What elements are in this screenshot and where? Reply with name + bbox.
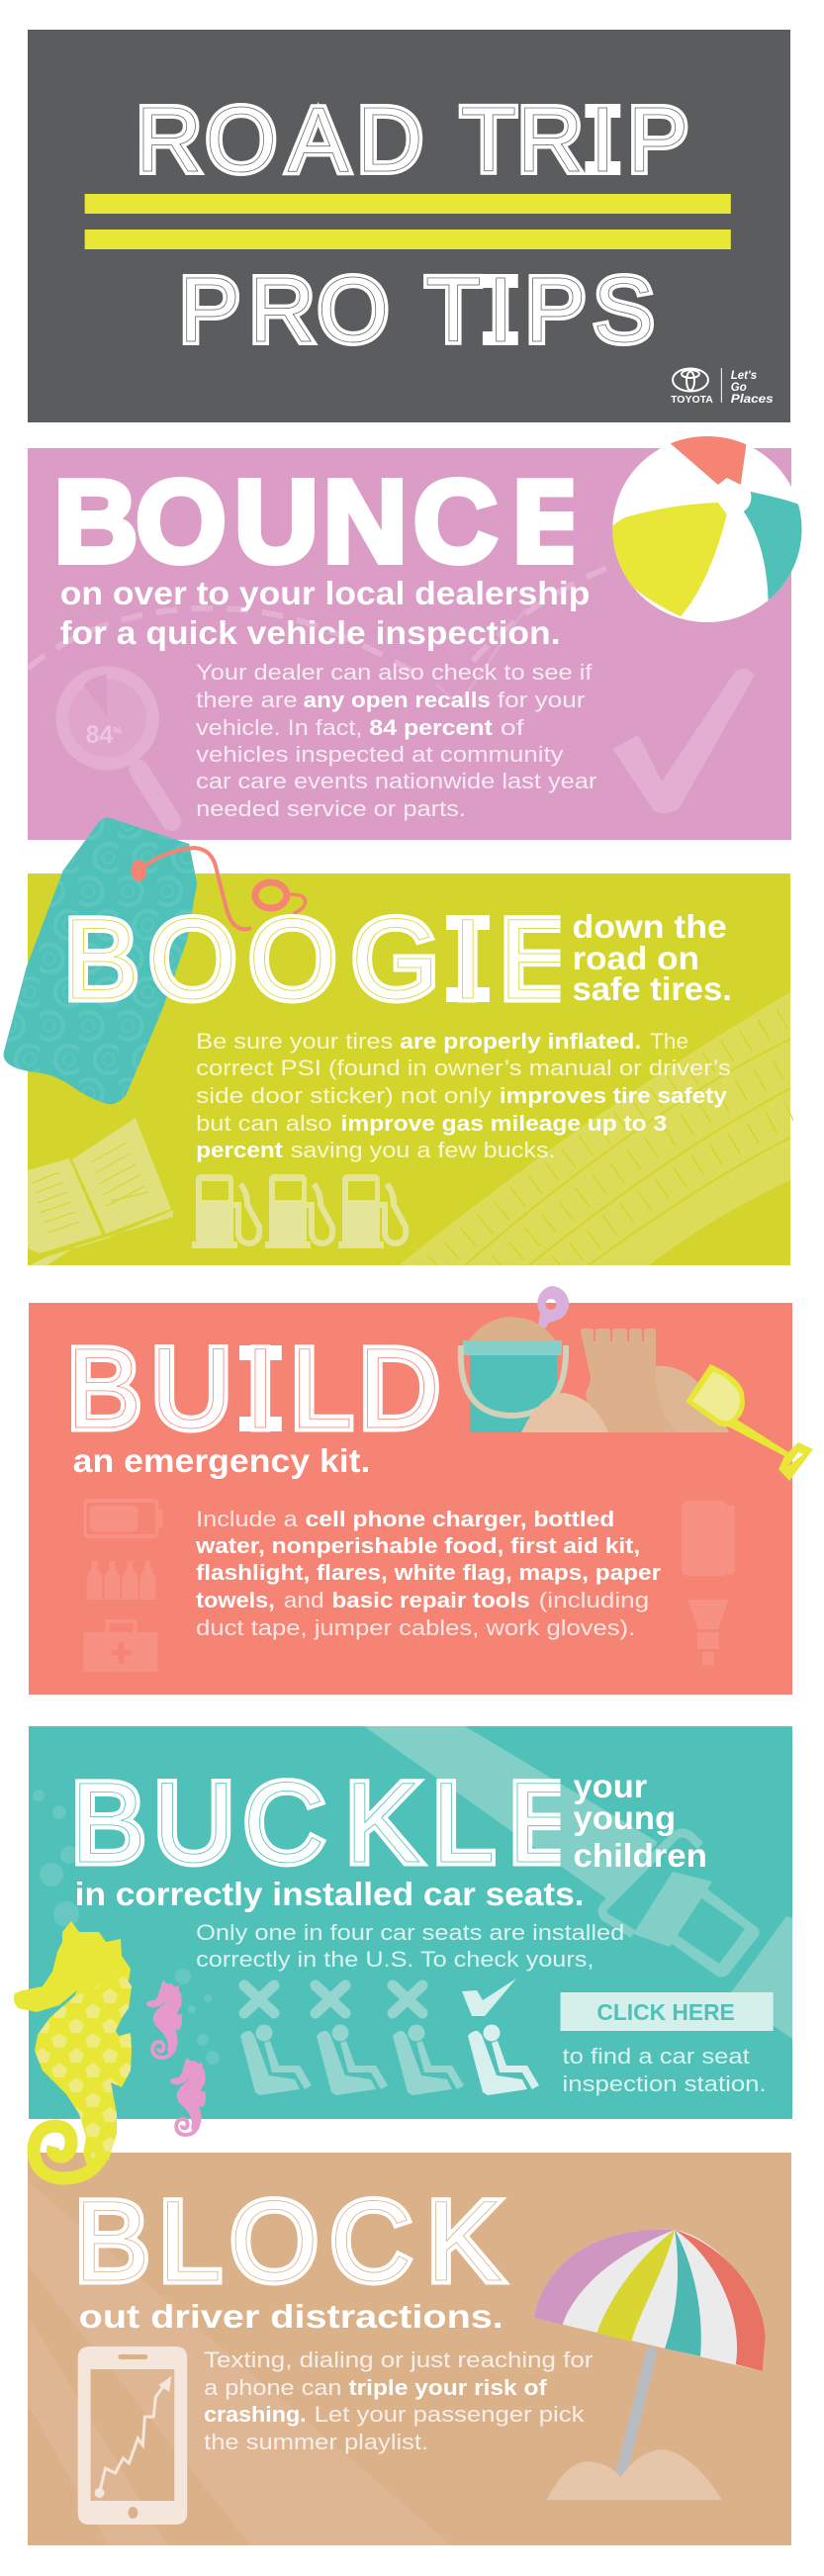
- heading: Boogie: BOOGIE: [63, 896, 575, 1023]
- panel: Bounce: [28, 431, 817, 840]
- shovel: [686, 1364, 813, 1481]
- text block: Build body: flashlight, flares, white flag, maps, paper: [196, 1560, 662, 1585]
- subheading: Boogie: down the: [573, 908, 727, 945]
- text block: Boogie body: correct PSI (found in owner’s manual or driver’s: [196, 1056, 731, 1080]
- subheading: Build: an emergency kit.: [73, 1442, 370, 1479]
- text block: Build body: [195, 1507, 662, 1640]
- illustration: boogie board with leash: [4, 817, 306, 1104]
- heading: Bounce: BOUNCE: [53, 457, 591, 588]
- subheading: Buckle side: your: [573, 1768, 647, 1804]
- heading: Buckle: BUCKLE: [70, 1760, 584, 1886]
- illustration: large yellow seahorse: [14, 1921, 132, 2178]
- text block: Bounce body: of: [501, 715, 525, 740]
- text block: Build body: (including: [539, 1588, 649, 1612]
- text block: Buckle note: [563, 2044, 767, 2096]
- sand mound right: [646, 1366, 729, 1432]
- illustration: sand castle, bucket and shovel: [461, 1286, 813, 1481]
- illustration: open book: [28, 1118, 173, 1265]
- icon: first aid kit: [84, 1619, 157, 1672]
- icon: magnifier with 84 percent: 84: [86, 721, 113, 749]
- icon: magnifier with 84 percent: %: [113, 726, 122, 737]
- text block: Block body: Let your passenger pick: [315, 2402, 584, 2427]
- text block: Block body: the summer playlist.: [204, 2430, 428, 2454]
- bucket: [470, 1355, 557, 1432]
- panel: Buckle: [29, 1726, 795, 2119]
- logo: Toyota: [671, 368, 774, 406]
- button: click here: CLICK HERE: [596, 1999, 735, 2025]
- text block: Bounce body: car care events nationwide last year: [196, 769, 596, 793]
- illustration: pink seahorse lower: [170, 2058, 206, 2135]
- text block: Bounce body: any open recalls: [304, 688, 491, 712]
- heading: Road Trip: ROAD TRIP: [136, 88, 688, 191]
- subheading: Bounce: for a quick vehicle inspection.: [60, 614, 561, 651]
- text block: Bounce body: vehicles inspected at community: [196, 742, 564, 767]
- logo: Toyota: Places: [731, 394, 774, 406]
- subheading: Block: out driver distractions.: [79, 2298, 504, 2335]
- text block: Block body: triple your risk of: [348, 2375, 547, 2400]
- heading: Block: BLOCK: [74, 2178, 503, 2305]
- subheading: Bounce: on over to your local dealership: [60, 575, 590, 611]
- text block: Boogie body: are properly inflated.: [400, 1029, 641, 1054]
- text block: Boogie body: percent: [196, 1138, 284, 1162]
- subheading: Buckle side: [573, 1768, 707, 1874]
- text block: Build body: basic repair tools: [332, 1588, 530, 1612]
- text block: Boogie body: side door sticker) not only: [196, 1083, 492, 1108]
- illustration: tire track: [399, 992, 790, 1265]
- text block: Boogie body: saving you a few bucks.: [291, 1138, 556, 1162]
- dashed route decoration: [28, 559, 630, 704]
- text block: Build body: cell phone charger, bottled: [306, 1507, 614, 1531]
- icon: large check mark: [612, 669, 755, 813]
- icon: battery: [84, 1499, 162, 1538]
- text block: Build body: water, nonperishable food, first aid kit,: [195, 1533, 640, 1558]
- decoration: bubbles: [33, 1790, 220, 2065]
- logo: Toyota: Let's: [731, 370, 757, 382]
- text block: Bounce body: 84 percent: [369, 715, 494, 740]
- heading: Buckle: [75, 1778, 560, 1868]
- heading: Boogie: [68, 914, 560, 1003]
- text block: Buckle body: correctly in the U.S. To check yours,: [196, 1947, 594, 1972]
- illustration: seatbelt: [364, 1726, 795, 2041]
- text block: Buckle body: [196, 1920, 624, 1972]
- illustration: beach umbrella: [534, 2230, 766, 2500]
- icons: car seats: [240, 2024, 539, 2095]
- sand tower: [581, 1329, 676, 1432]
- text block: Build body: duct tape, jumper cables, work gloves).: [196, 1615, 635, 1640]
- icon: flashlight: [687, 1600, 729, 1665]
- subheading: Buckle below: in correctly installed car seats.: [75, 1876, 584, 1912]
- text block: Bounce body: vehicle. In fact,: [196, 715, 362, 740]
- heading: Pro Tips: PRO TIPS: [179, 258, 654, 361]
- icon: phone with rising chart: [78, 2346, 187, 2525]
- text block: Bounce body: [196, 660, 596, 821]
- text block: Boogie body: but can also: [196, 1111, 332, 1136]
- icon: magnifier with 84 percent: [62, 673, 171, 821]
- text block: Block body: a phone can: [204, 2375, 342, 2400]
- text block: Bounce body: for your: [498, 688, 585, 712]
- pink sand mold: [537, 1286, 569, 1331]
- text block: Build body: and: [284, 1588, 324, 1612]
- subheading: Boogie: road on: [573, 940, 699, 976]
- text block: Boogie body: Be sure your tires: [196, 1029, 393, 1054]
- text block: Build body: Include a: [196, 1507, 299, 1531]
- icon: paper towels: [682, 1501, 735, 1576]
- panel: Block: [28, 2153, 791, 2545]
- text block: Build body: towels,: [196, 1588, 275, 1612]
- road lines: [85, 194, 731, 249]
- panel: title header: [28, 30, 790, 422]
- button: click here: [561, 1992, 774, 2031]
- text block: Buckle note: to find a car seat: [563, 2044, 750, 2069]
- icon: beach ball: [612, 436, 801, 622]
- text block: Bounce body: there are: [196, 688, 298, 712]
- text block: Bounce body: needed service or parts.: [196, 796, 466, 821]
- icons: gas pumps: [192, 1174, 406, 1248]
- heading: Boogie: BOOGIE: [63, 896, 575, 1023]
- heading: Buckle: BUCKLE: [70, 1760, 584, 1886]
- decoration: sun rays: [28, 2181, 451, 2545]
- logo: Toyota: Go: [731, 382, 747, 394]
- text block: Boogie body: improve gas mileage up to 3: [341, 1111, 667, 1136]
- text block: Block body: [204, 2347, 593, 2454]
- subheading: Buckle side: young: [573, 1799, 676, 1836]
- subheading: Boogie: [573, 908, 732, 1007]
- heading: Build: BUILD: [66, 1326, 440, 1452]
- text block: Boogie body: improves tire safety: [500, 1083, 728, 1108]
- heading: Pro Tips: PRO TIPS: [179, 258, 654, 361]
- text block: Block body: Texting, dialing or just reaching for: [204, 2347, 593, 2372]
- subheading: Bounce: [60, 575, 590, 651]
- heading: Road Trip: ROAD TRIP: [136, 88, 688, 191]
- panel: Build: [29, 1286, 813, 1695]
- text block: Buckle note: inspection station.: [563, 2071, 767, 2096]
- illustration: pink seahorse upper: [146, 1980, 182, 2058]
- sand mound front: [521, 1393, 608, 1432]
- text block: Boogie body: The: [650, 1029, 688, 1054]
- icons: three crosses and a check: [244, 1978, 516, 2016]
- subheading: Buckle side: children: [573, 1837, 707, 1874]
- subheading: Boogie: safe tires.: [573, 970, 732, 1007]
- sand dome: [468, 1317, 556, 1341]
- text block: Buckle body: Only one in four car seats are installed: [196, 1920, 624, 1945]
- heading: Block: BLOCK: [74, 2178, 503, 2305]
- icon: water bottles: [87, 1561, 155, 1600]
- logo: Toyota: TOYOTA: [671, 395, 713, 406]
- heading: Build: BUILD: [66, 1326, 440, 1452]
- text block: Boogie body: [196, 1029, 731, 1162]
- text block: Block body: crashing.: [204, 2402, 307, 2427]
- text block: Bounce body: Your dealer can also check to see if: [196, 660, 593, 685]
- panel: Boogie: [4, 817, 790, 1265]
